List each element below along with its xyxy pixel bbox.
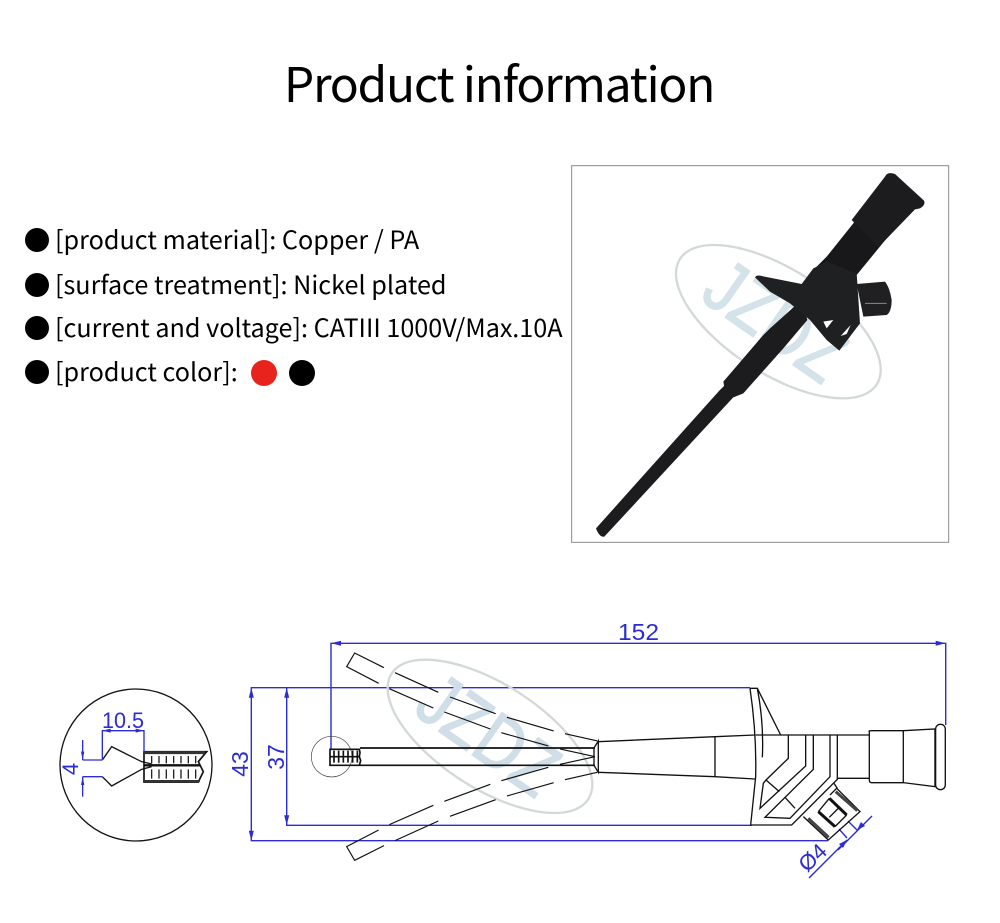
dimension labels: 37 [263, 744, 289, 770]
detail circle with tip dimensions: 4 [58, 763, 83, 775]
spec: current and voltage: [current and voltage]: CATIII 1000V/Max.10A [55, 309, 563, 345]
icon: black test probe [596, 173, 924, 537]
dimension arrows [249, 641, 946, 848]
watermark: JZDZ: JZDZ [402, 657, 575, 812]
dimension labels: Ø4 [793, 838, 832, 877]
watermark: JZDZ: JZDZ [689, 243, 862, 398]
panel: product photo [571, 165, 950, 543]
title: Product information [284, 46, 714, 116]
probe outline: trigger body and side socket [750, 688, 869, 840]
dimension lines [251, 643, 946, 878]
detail circle with tip dimensions: 10.5 [102, 708, 144, 733]
spec: product material: [product material]: Copper / PA [55, 221, 419, 257]
watermark: JZDZ [652, 215, 905, 428]
dimension labels [227, 619, 832, 877]
probe outline: shaft and rear cap [598, 724, 945, 790]
dimension labels: 152 [618, 619, 659, 645]
probe outline: hook jaws and shaft [311, 653, 598, 860]
dimension labels: 43 [227, 751, 253, 777]
watermark: JZDZ [363, 630, 616, 843]
spec: product color [25, 353, 315, 389]
spec: surface treatment: [surface treatment]: Nickel plated [55, 266, 447, 302]
detail circle with tip dimensions [58, 689, 212, 841]
spec: product color: [product color]: [55, 353, 238, 389]
